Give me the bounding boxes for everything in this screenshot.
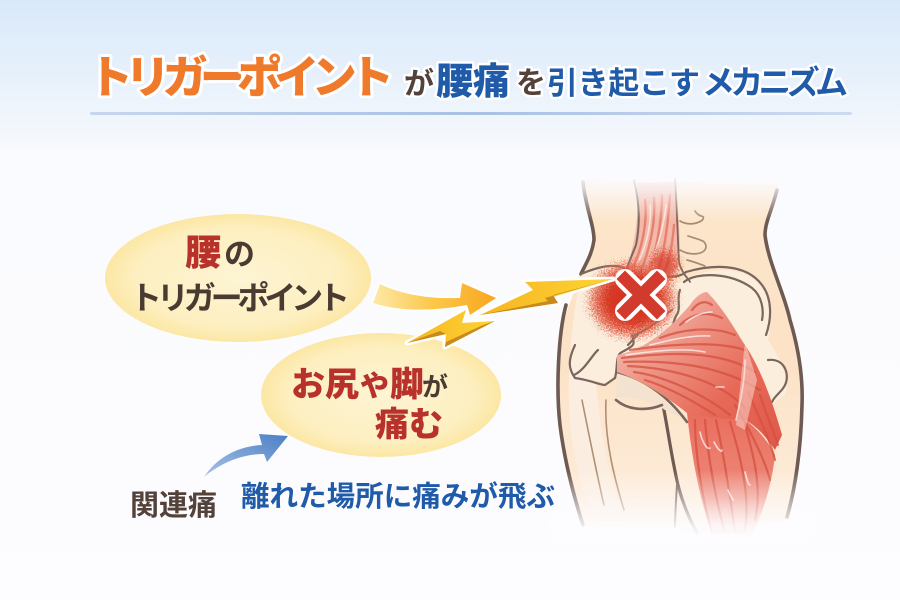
bone outlines (570, 266, 787, 422)
anatomical illustration: lower back and hip (550, 172, 815, 540)
translucent glute highlight (736, 342, 757, 430)
arrow: orange curved (373, 283, 496, 315)
bubble: buttock and leg pain: が (422, 372, 448, 402)
bubble: buttock and leg pain: や (360, 370, 389, 403)
illustration fades (550, 470, 815, 540)
title: が (404, 67, 434, 101)
caption: pain far from source: 離れた場所に痛みが飛ぶ (241, 480, 555, 513)
spine muscle (626, 182, 680, 290)
arrow: blue curved (204, 434, 288, 477)
muscle: thigh (687, 413, 775, 535)
title: 腰痛 (436, 61, 510, 102)
title: を (516, 67, 546, 100)
bubble: lower back trigger point (105, 214, 371, 342)
bubble: buttock and leg pain: 痛む (375, 406, 443, 444)
bubble: lower back trigger point: の (224, 237, 255, 272)
label: referred pain: 関連痛 (130, 489, 217, 522)
pelvis bones (570, 266, 787, 405)
bubble: buttock and leg pain: お尻 (291, 366, 359, 404)
icon: large lightning bolt (480, 279, 613, 315)
spine and vertebrae outlines (626, 178, 690, 282)
bubble: lower back trigger point: 腰 (185, 232, 221, 273)
bubble: buttock and leg pain (261, 333, 501, 457)
skin silhouette (558, 180, 802, 533)
title (88, 52, 848, 103)
body outlines (558, 182, 802, 533)
title: トリガーポイント (88, 52, 394, 103)
icon: small lightning bolt (407, 310, 495, 347)
title: 引き起こす (547, 66, 700, 101)
icon: red cross (625, 279, 657, 311)
title underline (90, 112, 852, 115)
bubble: buttock and leg pain: 脚 (390, 366, 424, 404)
muscle fibres (622, 302, 778, 532)
bubble: lower back trigger point: トリガーポイント (130, 280, 350, 316)
title: メカニズム (702, 64, 848, 101)
muscle: gluteus (617, 292, 782, 450)
trigger point redness (584, 246, 682, 342)
femur lines (582, 400, 624, 510)
